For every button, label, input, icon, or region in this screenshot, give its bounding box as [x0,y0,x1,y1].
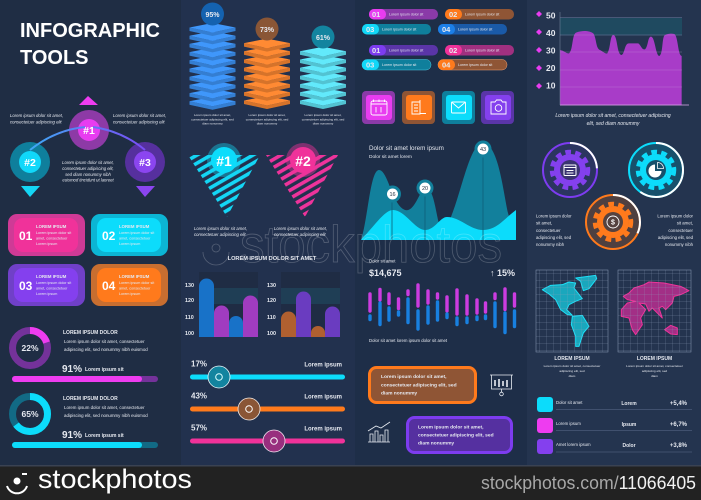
pill 02 orange: Lorem ipsum dolor sit [465,12,499,16]
axis labels: 20 [546,63,556,73]
top band [560,18,682,36]
title: TOOLS [20,47,89,69]
left text: adipiscing elit, sed [536,235,572,240]
axis labels: 130 [185,283,194,289]
notes: consectetuer adipiscing elit [194,232,246,237]
row 1: Dolor sit amet [556,400,583,405]
labels: $14,675 [369,268,402,278]
map captions: Lorem ipsum dolor sit amet, consectetuer [544,364,600,368]
pill 04 blue: 04 [442,25,451,34]
pill 02 orange: 02 [449,10,457,19]
row 1: Lorem [621,401,637,407]
blue segments [370,299,514,332]
captions: Lorem ipsum dolor sit amet, [194,113,231,117]
pill 02 pink: 02 [449,46,457,55]
marker 20 [416,180,434,196]
left note [10,113,63,124]
card 03 [8,264,85,306]
panel: numbered cards [8,214,168,306]
pill 01 purple [369,9,438,20]
stat text [62,330,148,375]
right note: consectetuer adipiscing elit [113,120,165,124]
arrow: purple down [136,186,155,197]
marker 43 [474,140,492,158]
axis labels: 40 [546,28,556,38]
stat text: LOREM IPSUM DOLOR [63,396,118,402]
labels [369,258,515,343]
left note: Lorem ipsum dolor sit amet, [10,113,63,118]
arrow: cyan down [21,186,40,197]
triangle 1 [188,155,260,217]
panel: magenta area chart [536,10,689,127]
triangle 2 [266,155,338,217]
badge 2 [286,143,320,177]
row 3: Dolor [622,443,636,449]
gear cyan [629,143,683,197]
panel: striped triangles [188,143,338,237]
panel: bar charts [185,256,340,337]
heading: LOREM IPSUM DOLOR SIT AMET [228,256,317,262]
icon: line chart [368,422,390,442]
center note [62,160,114,182]
labels: Dolor sit amet lorem ipsum dolor sit amet [369,338,448,343]
map captions [544,356,683,378]
pill 04 orange outline: 04 [442,60,451,70]
footer id: stockphotos.com/11066405 [481,473,696,493]
blue stack [190,23,236,110]
area [560,31,682,105]
card 01: Lorem ipsum dolor sit [36,231,71,235]
badge 61%: 61% [316,35,331,42]
caption: Lorem ipsum dolor sit amet, consectetuer adipiscing [555,113,671,119]
pill 04 orange outline: Lorem ipsum dolor sit [458,63,492,67]
card 02 [91,214,168,256]
badge 95%: 95% [205,12,220,19]
panel: split bars [369,258,515,343]
pill 04 blue: Lorem ipsum dolor sit [458,28,492,32]
notes: Lorem ipsum dolor sit amet, [194,226,247,231]
center note: Lorem ipsum dolor sit amet, [62,160,114,165]
donut chart [12,396,48,432]
card 03: Lorem ipsum [36,292,57,296]
captions: Lorem ipsum dolor sit amet, [304,113,342,117]
front area [361,210,516,240]
callout orange: consectetuer adipiscing elit, sed [381,382,457,388]
slider 43%: 43% [191,392,207,400]
footer logo: stockphotos [38,464,192,494]
row 1 [537,397,692,412]
slider 17% [190,360,345,388]
map captions: LOREM IPSUM [637,356,672,362]
axis labels [546,10,556,90]
back area [361,143,516,240]
pill 02 orange [445,9,514,20]
chart title [369,145,444,160]
badge 1: #1 [216,153,232,169]
pill 03 cyan: Lorem ipsum dolor sit [382,28,416,32]
arrow: magenta up [79,96,98,105]
badge 61% [312,26,334,48]
right bar chart [281,272,340,337]
map captions: LOREM IPSUM [554,356,590,362]
row 2: Ipsum [622,422,637,428]
stat text: adipiscing elit, sed nonummy nibh euismod [64,413,148,418]
right text: adipiscing elit, sed [658,235,694,240]
axis diamonds [536,11,542,89]
card 01 [8,214,85,256]
left text: consectetuer [536,228,561,233]
left text: sit amet, [536,220,552,226]
pill 01 violet: 01 [372,46,380,55]
labels: ↑ 15% [490,268,515,278]
callout purple: Lorem ipsum dolor sit amet, [418,424,484,430]
axis labels: 120 [185,298,194,304]
progress bar [12,442,158,448]
captions: consectetuer adipiscing elit, sed [302,118,345,122]
pill 02 pink: Lorem ipsum dolor sit [465,48,499,52]
donut chart [12,330,48,366]
pill 01 purple: 01 [372,10,380,19]
node labels [24,125,151,169]
panel: table [537,397,692,454]
marker lines [392,149,483,240]
axis labels: 110 [267,315,276,321]
card 03: LOREM IPSUM [36,274,67,279]
slider 17%: Lorem ipsum [304,362,342,368]
icon: presentation board [490,375,513,396]
icon: camera [481,91,514,124]
slider 57%: Lorem ipsum [304,426,342,432]
row 3: +3,8% [670,443,688,449]
card 02: amet, consectetuer [119,236,151,240]
stat text: Lorem ipsum sit [85,433,124,439]
right text: Lorem ipsum dolor [657,214,694,218]
stat text: 91% [62,364,82,375]
pill 02 pink [445,45,514,56]
slider 43% [190,392,345,420]
axis labels: 110 [185,315,194,321]
map captions: diam [651,374,658,378]
card 02: Lorem ipsum dolor sit [119,231,154,235]
callout purple [408,418,512,452]
captions: diam nonummy [202,122,223,126]
callout orange: Lorem ipsum dolor sit amet, [381,374,447,380]
card 02: 02 [102,229,116,243]
donut chart: 65% [21,409,39,419]
progress bar [12,376,158,382]
stat text: Lorem ipsum dolor sit amet, consectetuer [64,405,145,410]
node labels: #2 [24,157,36,169]
node labels: #1 [83,125,95,137]
badge 73% [256,18,278,40]
pill 04 blue [438,24,507,34]
marker 16 [384,186,401,202]
orange stack [244,39,290,109]
captions: consectetuer adipiscing elit, sed [191,118,234,122]
watermark: stockphotos [240,216,502,274]
panel: sliders [190,360,345,452]
title: INFOGRAPHIC [20,20,160,42]
map: americas [536,270,608,352]
marker 43: 43 [480,147,486,153]
marker 20: 20 [422,186,428,192]
gear orange: $ [611,220,615,226]
row 2 [537,418,692,433]
connector arc [30,127,145,150]
icon: document [402,91,435,124]
card 04: LOREM IPSUM [119,274,150,279]
map captions: Lorem ipsum dolor sit amet, consectetuer [626,364,683,368]
map captions: adipiscing elit, sed [642,369,667,373]
row 3 [537,439,692,454]
notes [194,226,327,237]
map captions: diam [569,374,576,378]
captions: Lorem ipsum dolor sit amet, [248,113,286,117]
axis labels [185,283,276,337]
left bar chart [199,272,258,337]
stat text: LOREM IPSUM DOLOR [63,330,118,336]
right note: Lorem ipsum dolor sit amet, [113,113,166,118]
footer bar [0,464,701,500]
right note [113,113,166,124]
panel: area chart [361,140,516,240]
marker 16: 16 [389,192,396,198]
badge 95% [201,2,224,26]
card 04 [91,264,168,306]
node labels: #3 [139,157,151,169]
card 04: Lorem ipsum [119,292,140,296]
gear purple [543,143,597,197]
right text: nonummy nibh [665,242,694,247]
left note: consectetuer adipiscing elit [10,120,62,124]
stat text: Lorem ipsum sit [85,367,124,373]
pill 01 purple: Lorem ipsum dolor sit [389,12,423,16]
chart title: Dolor sit amet lorem [369,154,412,160]
donut chart: 22% [21,343,39,353]
captions: consectetuer adipiscing elit, sed [246,118,289,122]
callout purple: diam nonummy [418,440,454,446]
pill 03 cyan [362,24,431,34]
baseline [560,104,689,106]
pill 03 cyan outline: 03 [366,60,374,70]
panel: icon tiles [362,91,514,124]
right text: consectetuer [668,228,694,233]
row 3: Amet lorem ipsum [556,442,591,447]
caption: elit, sed diam nonummy [587,121,640,127]
axis labels: 130 [267,283,276,289]
axis [559,12,561,105]
pill 01 violet [369,45,438,56]
captions [191,113,345,126]
pill 01 violet: Lorem ipsum dolor sit [389,48,423,52]
row 1: +5,4% [670,401,688,407]
stat text: adipiscing elit, sed nonummy nibh euismod [64,347,148,352]
callout orange: diam nonummy [381,390,417,396]
card 03: 03 [19,279,33,293]
pill 03 cyan outline [362,60,431,70]
left text: Lorem ipsum dolor [536,214,572,218]
axis labels: 100 [185,331,194,337]
grid lines [560,18,682,87]
gear orange [586,195,640,249]
badge 73%: 73% [260,27,275,34]
callout purple: consectetuer adipiscing elit, sed [418,432,494,438]
callout orange [370,368,476,402]
right text [657,214,694,247]
row 2: Lorem ipsum [556,421,581,426]
captions: diam nonummy [257,122,278,126]
captions: diam nonummy [313,122,334,126]
icon: envelope [442,91,475,124]
pill 03 cyan: 03 [366,25,374,34]
right text: sit amet, [677,220,693,226]
title [20,20,160,69]
card 03: amet, consectetuer [36,286,68,290]
slider 57%: 57% [191,424,207,432]
panel: numbered arc diagram [10,96,166,197]
axis labels: 50 [546,10,556,20]
labels: Dolor sit amet [369,258,396,264]
center note: sed diam nonummy nibh [65,172,111,177]
card 02: LOREM IPSUM [119,224,150,229]
panel: stacked layers [190,2,346,126]
chart title: Dolor sit amet lorem ipsum [369,145,444,152]
row 2: +6,7% [670,422,688,428]
left text [536,214,572,247]
panel: maps [536,270,691,378]
node 2 [10,142,50,182]
slider 43%: Lorem ipsum [304,394,342,400]
caption [555,113,671,127]
badge 2: #2 [295,153,311,169]
slider 17%: 17% [191,360,207,368]
notes: consectetuer adipiscing elit [274,232,326,237]
card 04: 04 [102,279,116,293]
stat text [62,396,148,441]
card 01: LOREM IPSUM [36,224,67,229]
pill 03 cyan outline: Lorem ipsum dolor sit [382,63,416,67]
center note: euismod tincidunt ut laoreet [62,178,114,182]
node 1 [69,110,109,150]
map: eurasia and africa [618,270,691,352]
stat text: 91% [62,430,82,441]
cyan stack [300,47,346,109]
axis labels: 120 [267,298,276,304]
panel: pill tags [362,9,514,70]
center note: consectetuer adipiscing elit, [62,166,114,171]
card 01: amet, consectetuer [36,236,68,240]
node 3 [125,142,165,182]
panel: donut stat 65% [12,396,158,448]
axis labels: 10 [546,80,556,90]
icon: calendar [362,91,395,124]
panel: gears [536,143,694,249]
notes: Lorem ipsum dolor sit amet, [274,226,327,231]
card 01: Lorem ipsum [36,242,57,246]
left text: nonummy nibh [536,242,565,247]
slider 57% [190,424,345,452]
panel: callouts [368,368,513,452]
pill 04 orange outline [438,60,507,70]
axis labels: 100 [267,331,276,337]
magenta segments [370,285,514,314]
map captions: adipiscing elit, sed [559,369,585,373]
badge 1 [207,143,241,177]
panel: donut stat 22% [12,330,158,382]
card 02: Lorem ipsum [119,242,140,246]
card 04: amet, consectetuer [119,286,151,290]
card 01: 01 [19,229,33,243]
stat text: Lorem ipsum dolor sit amet, consectetuer [64,339,145,344]
card 03: Lorem ipsum dolor sit [36,281,71,285]
axis labels: 30 [546,46,556,56]
card 04: Lorem ipsum dolor sit [119,281,154,285]
